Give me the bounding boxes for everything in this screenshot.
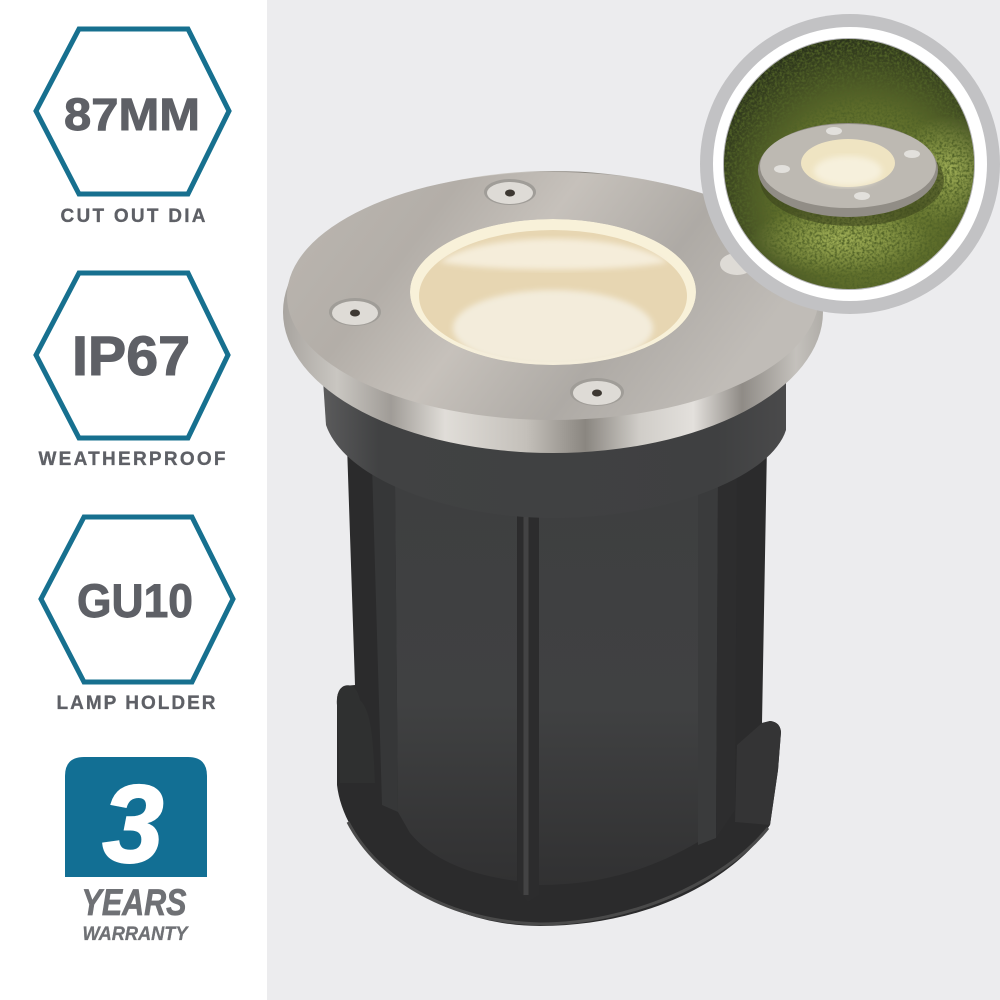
left white panel: [0, 0, 267, 1000]
base lower edge highlight: [348, 822, 768, 924]
left rib: [372, 465, 398, 812]
badge: 87mm cut out: [36, 29, 229, 227]
warranty badge: YEARS: [82, 882, 187, 923]
badge: GU10 lamp holder: GU10: [77, 574, 193, 627]
screws: [484, 179, 536, 205]
steel flange top: [287, 172, 819, 420]
left foot clip: [337, 685, 375, 783]
product: ground light: [283, 171, 823, 926]
warranty badge: 3: [102, 763, 164, 886]
collar: [323, 380, 786, 518]
badge: IP67 weatherproof: [36, 273, 228, 470]
warranty badge: WARRANTY: [82, 924, 190, 945]
central rib: [518, 516, 539, 902]
warranty badge: [65, 757, 207, 945]
right foot clip: [735, 721, 781, 825]
inset photo: light installed in grass: [700, 14, 1000, 314]
badge: IP67 weatherproof: IP67: [72, 324, 190, 387]
lamp opening: [410, 219, 696, 366]
badge: IP67 weatherproof: WEATHERPROOF: [38, 449, 226, 470]
right rib: [698, 482, 718, 845]
badge: 87mm cut out: 87MM: [64, 89, 200, 140]
badge: 87mm cut out: CUT OUT DIA: [60, 206, 206, 227]
steel flange rim: [283, 171, 823, 453]
housing silhouette and base: [337, 445, 781, 926]
badge: GU10 lamp holder: [41, 517, 233, 714]
left body panel: [395, 485, 517, 881]
right body panel: [539, 490, 698, 885]
badge: GU10 lamp holder: LAMP HOLDER: [56, 693, 216, 714]
